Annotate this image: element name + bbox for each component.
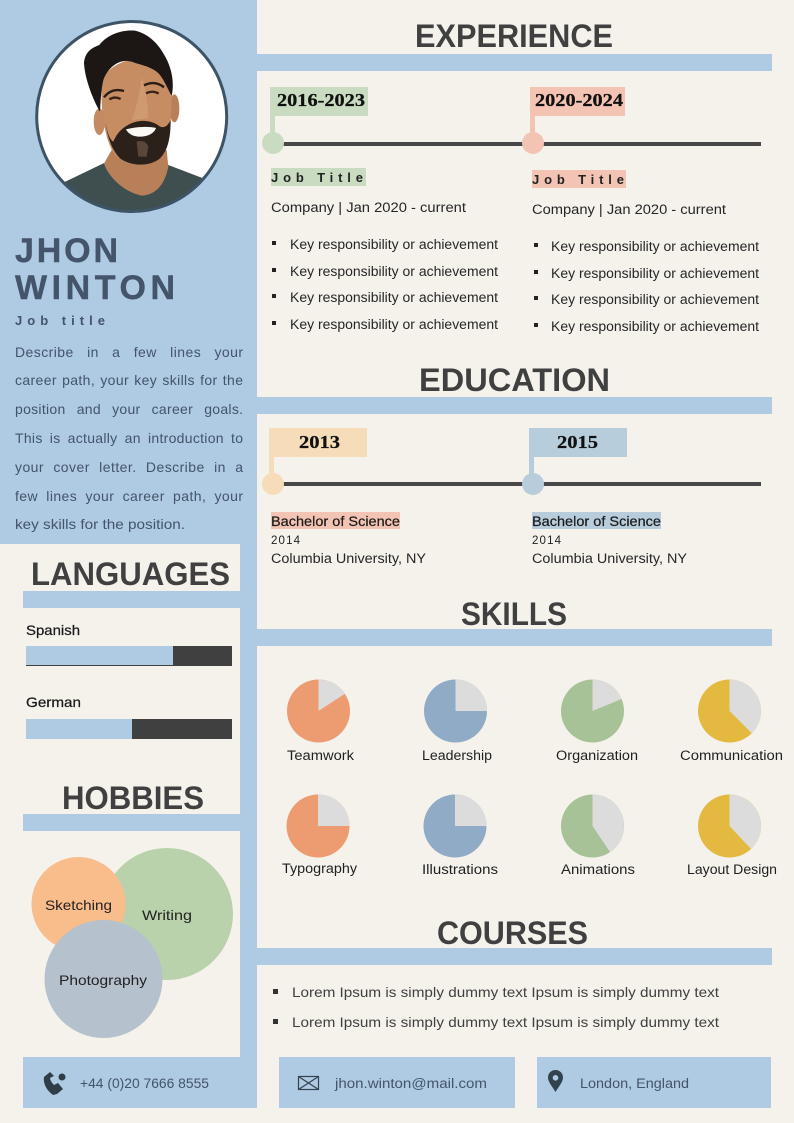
skill: leadership <box>422 680 492 763</box>
experience timeline <box>262 87 761 154</box>
experience entry 2: Job Title <box>532 172 624 187</box>
experience entry 2: Key responsibility or achievement <box>551 239 759 254</box>
skill: communication <box>680 680 783 763</box>
experience entry 1: Key responsibility or achievement <box>290 290 498 305</box>
portrait photo <box>37 22 227 233</box>
marker: 2013: 2013 <box>299 432 340 452</box>
education entry 1: Bachelor of Science <box>271 514 400 529</box>
heading: experience: EXPERIENCE <box>415 18 613 54</box>
skill: illustrations: Illustrations <box>422 862 498 877</box>
experience entry 1: Job Title <box>271 170 363 185</box>
contact: location <box>537 1057 771 1108</box>
heading: hobbies: HOBBIES <box>62 780 204 816</box>
panel: left sidebar <box>0 0 257 1108</box>
skill: communication: Communication <box>680 748 783 763</box>
contact: phone <box>23 1057 257 1108</box>
skill: layout design <box>687 794 777 877</box>
education entry 2: 2014 <box>532 535 562 547</box>
name: WINTON <box>15 269 175 307</box>
marker: 2020-2024 <box>522 87 625 154</box>
education entry 1: Columbia University, NY <box>271 551 426 566</box>
experience entry 2 <box>532 170 759 334</box>
marker: 2013 <box>262 428 367 495</box>
skill: organization: Organization <box>556 748 638 763</box>
education entry 1 <box>271 512 426 566</box>
skill: teamwork: Teamwork <box>287 748 354 763</box>
experience entry 1: Key responsibility or achievement <box>290 264 498 279</box>
language: Spanish: Spanish <box>26 622 80 638</box>
hobbies bubbles <box>32 848 233 1038</box>
intro paragraph: Describe in a few lines your <box>15 344 243 360</box>
education entry 2: Bachelor of Science <box>532 514 661 529</box>
heading: languages: LANGUAGES <box>31 556 230 592</box>
skill: layout design: Layout Design <box>687 862 777 877</box>
job title: Job title <box>15 313 105 328</box>
intro paragraph: few lines your career path, your <box>15 488 243 504</box>
skill: typography: Typography <box>282 861 357 876</box>
marker: 2015 <box>522 428 627 495</box>
language: German <box>26 694 232 739</box>
skill: organization <box>556 680 638 763</box>
intro paragraph <box>15 344 243 532</box>
label: writing: Writing <box>142 907 192 923</box>
bubble: writing <box>101 848 233 980</box>
experience entry 1: Key responsibility or achievement <box>290 317 498 332</box>
skill: typography <box>282 794 357 876</box>
experience entry 1: Key responsibility or achievement <box>290 237 498 252</box>
experience entry 2: Key responsibility or achievement <box>551 266 759 281</box>
icon: envelope <box>298 1076 318 1090</box>
experience entry 2: Company | Jan 2020 - current <box>532 202 726 217</box>
contact: phone: +44 (0)20 7666 8555 <box>80 1076 209 1091</box>
name <box>15 232 175 307</box>
contact: email: jhon.winton@mail.com <box>334 1076 487 1091</box>
courses list: Lorem Ipsum is simply dummy text Ipsum is simply dummy text <box>292 1014 719 1030</box>
education timeline <box>262 428 761 495</box>
heading bar: skills <box>257 629 772 646</box>
language: German: German <box>26 694 81 710</box>
education entry 2: Columbia University, NY <box>532 551 687 566</box>
marker: 2016-2023: 2016-2023 <box>277 90 365 110</box>
contact: email <box>279 1057 515 1108</box>
courses list <box>273 984 719 1030</box>
icon: phone <box>44 1072 66 1095</box>
education entry 2 <box>532 512 687 566</box>
icon: map pin <box>548 1070 563 1092</box>
intro paragraph: your cover letter. Describe in a <box>15 459 243 475</box>
education entry 1: 2014 <box>271 535 301 547</box>
label: photography: Photography <box>59 972 147 988</box>
bubble: photography <box>44 920 162 1038</box>
intro paragraph: This is actually an introduction to <box>15 430 243 446</box>
marker: 2016-2023 <box>262 87 368 154</box>
heading bar: languages <box>23 591 240 608</box>
experience entry 2: Key responsibility or achievement <box>551 292 759 307</box>
experience entry 2: Key responsibility or achievement <box>551 319 759 334</box>
marker: 2020-2024: 2020-2024 <box>535 90 623 110</box>
contact: location: London, England <box>580 1076 689 1091</box>
timeline line <box>273 482 761 486</box>
intro paragraph: key skills for the position. <box>15 516 185 532</box>
skill: teamwork <box>287 680 354 763</box>
language: Spanish <box>26 622 232 666</box>
label: sketching: Sketching <box>45 897 112 913</box>
bubble: sketching <box>32 857 126 951</box>
courses list: Lorem Ipsum is simply dummy text Ipsum is simply dummy text <box>292 984 719 1000</box>
heading bar: experience <box>257 54 772 71</box>
skill: leadership: Leadership <box>422 748 492 763</box>
skill: animations: Animations <box>561 862 635 877</box>
heading: courses: COURSES <box>437 915 588 951</box>
name: JHON <box>15 232 118 270</box>
skill: illustrations <box>422 794 498 877</box>
timeline line <box>273 142 761 146</box>
intro paragraph: position and your career goals. <box>15 401 243 417</box>
intro paragraph: career path, your key skills for the <box>15 372 243 388</box>
skill: animations <box>561 794 635 877</box>
heading bar: courses <box>257 948 772 965</box>
experience entry 1: Company | Jan 2020 - current <box>271 200 466 215</box>
heading bar: hobbies <box>23 814 240 831</box>
marker: 2015: 2015 <box>557 432 598 452</box>
heading bar: education <box>257 397 772 414</box>
experience entry 1 <box>271 168 498 332</box>
heading: skills: SKILLS <box>461 596 567 632</box>
heading: education: EDUCATION <box>419 362 610 398</box>
